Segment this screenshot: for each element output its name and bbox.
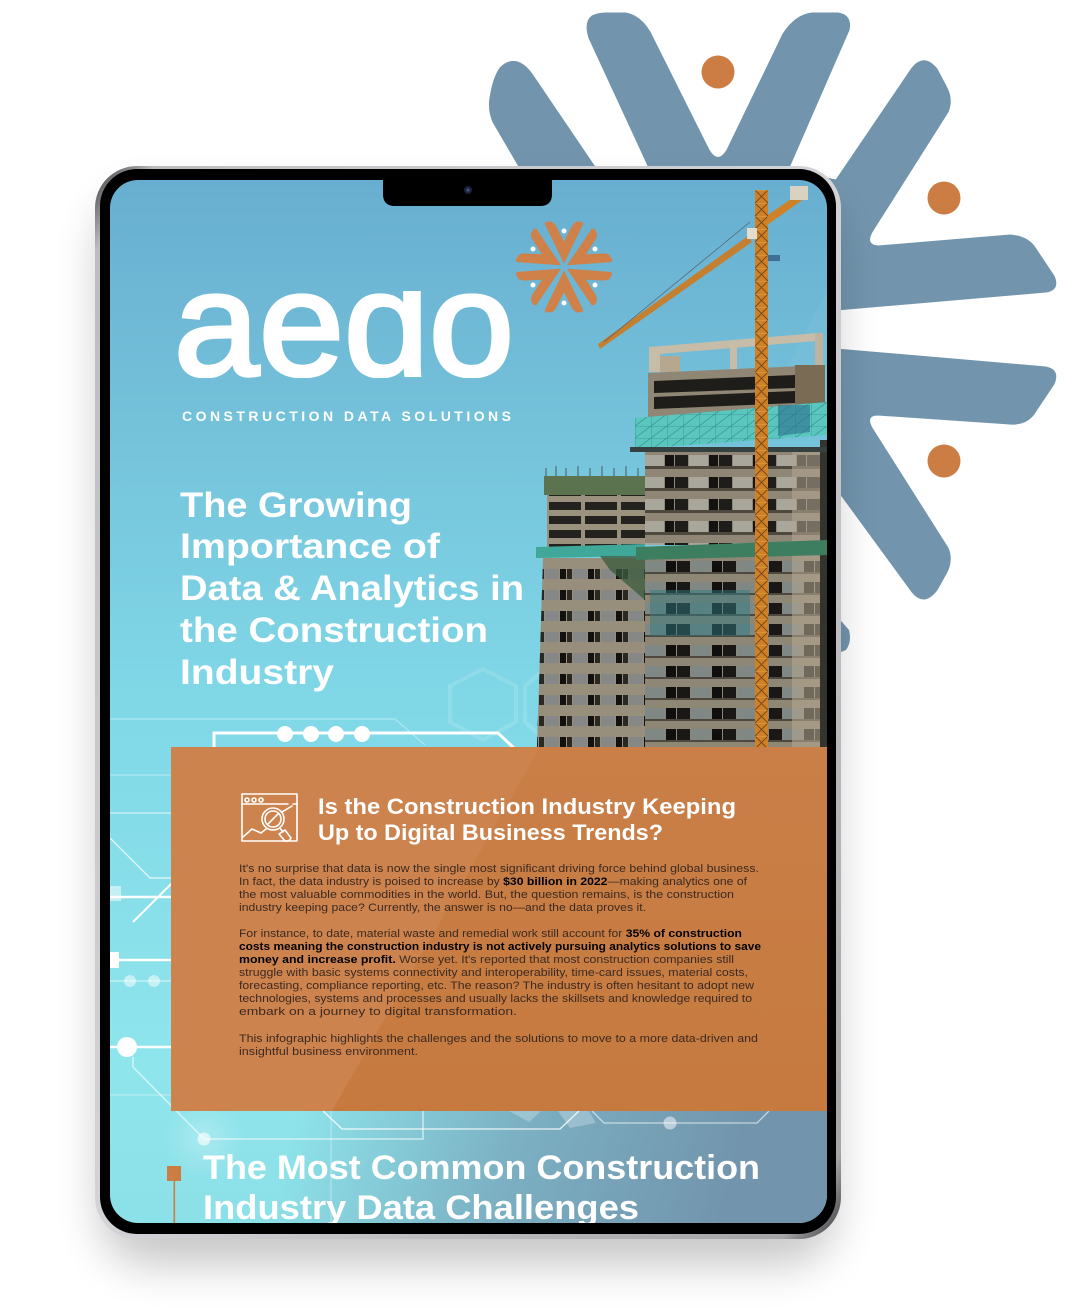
panel body text: costs meaning the construction industry is not actively pursuing analytics solutions to save <box>239 941 761 953</box>
orange dot right lower <box>928 444 960 478</box>
tablet mockup <box>95 166 841 1239</box>
background star mark <box>489 13 1056 654</box>
panel body text: technologies, systems and processes and usually lacks the skillsets and knowledge required to <box>239 993 752 1005</box>
main title <box>180 486 524 692</box>
orange dot right upper <box>928 182 960 214</box>
orange dot top <box>702 56 734 88</box>
circuit lines <box>110 719 769 1223</box>
panel body text <box>239 863 761 1058</box>
decorative hexagons <box>450 669 545 740</box>
panel: intro <box>171 747 827 1111</box>
main title: Industry <box>180 653 335 692</box>
panel body text: struggle with basic systems connectivity and interoperability, time-card issues, material costs, <box>239 967 748 979</box>
section heading: The Most Common Construction <box>203 1149 760 1187</box>
panel body text: embark on a journey to digital transformation. <box>239 1006 517 1018</box>
panel body text: In fact, the data industry is poised to increase by $30 billion in 2022 —making analytics one of <box>239 876 748 888</box>
tablet shadow <box>100 195 835 1265</box>
tablet frame <box>95 166 841 1239</box>
section marker <box>167 1166 181 1226</box>
tower crane <box>598 186 808 747</box>
logo wordmark: aedo <box>174 242 514 407</box>
logo symbol <box>516 222 612 312</box>
circuit nodes <box>110 726 676 1179</box>
left tower <box>536 466 645 747</box>
main title: the Construction <box>180 611 488 650</box>
panel body text: This infographic highlights the challenges and the solutions to move to a more data-driven and <box>239 1033 758 1045</box>
panel heading <box>318 794 736 845</box>
tablet notch and camera <box>383 178 552 206</box>
icon: analytics window with magnifier <box>242 794 297 841</box>
main tower <box>636 440 827 747</box>
panel body text: insightful business environment. <box>239 1046 418 1058</box>
panel heading: Is the Construction Industry Keeping <box>318 794 736 819</box>
panel body text: It's no surprise that data is now the single most significant driving force behind global business. <box>239 863 759 875</box>
panel heading: Up to Digital Business Trends? <box>318 820 663 845</box>
main title: The Growing <box>180 486 412 525</box>
upper block and roof frame <box>630 333 827 452</box>
panel body text: forecasting, compliance reporting, etc. The reason? The industry is often hesitant to adopt new <box>239 980 754 992</box>
logo symbol dots <box>530 228 598 306</box>
tablet screen <box>110 180 827 1227</box>
panel body text: money and increase profit. Worse yet. It's reported that most construction companies still <box>239 954 734 966</box>
panel body text: For instance, to date, material waste and remedial work still account for 35% of construction <box>239 928 742 940</box>
logo tagline: CONSTRUCTION DATA SOLUTIONS <box>182 408 511 424</box>
panel body text: the most valuable commodities in the world. But, the question remains, is the construction <box>239 889 734 901</box>
main title: Data & Analytics in <box>180 569 524 608</box>
section heading <box>203 1154 758 1223</box>
bottom dusk overlay <box>304 1111 827 1223</box>
main title: Importance of <box>180 527 440 566</box>
panel body text: industry keeping pace? Currently, the answer is no—and the data proves it. <box>239 902 646 914</box>
construction building illustration <box>536 186 827 747</box>
section heading: Industry Data Challenges <box>203 1189 639 1227</box>
